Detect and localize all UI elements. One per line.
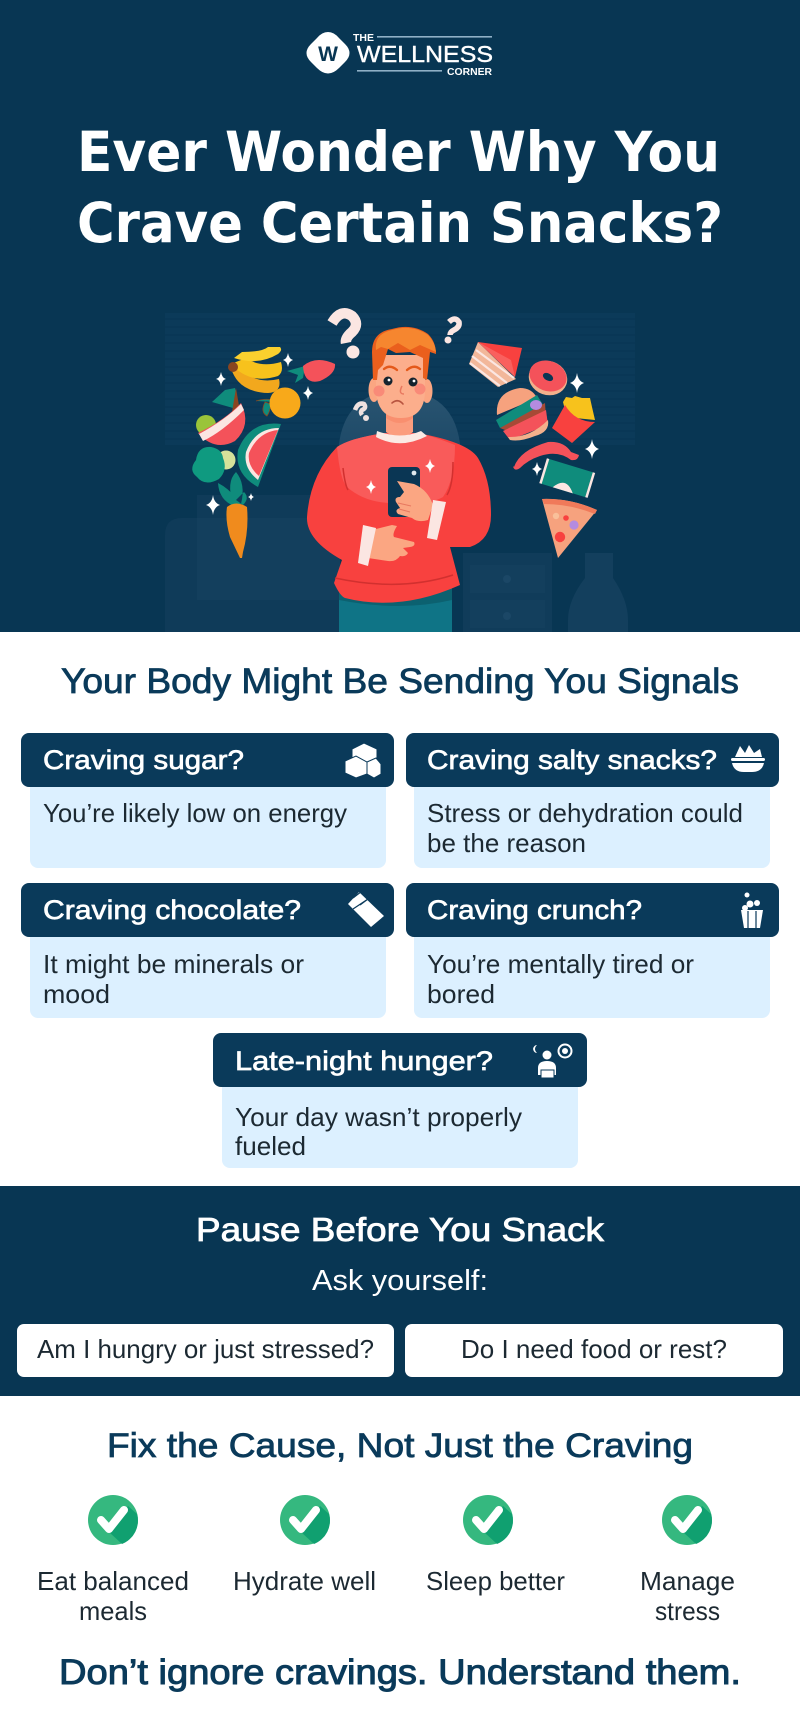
icon: strawberry: [287, 360, 335, 383]
card: craving salty snacks: Stress or dehydration could: [427, 798, 743, 828]
icon: person at night: [533, 1044, 572, 1078]
card: craving crunch: Craving crunch?: [427, 895, 642, 925]
logo wordmark: THE: [353, 33, 374, 44]
eyes: [384, 376, 392, 386]
icon: pizza: [542, 499, 597, 558]
question box 1: [17, 1324, 394, 1377]
closing statement: Don’t ignore cravings. Understand them.: [59, 1653, 741, 1692]
sweater highlight: [337, 433, 455, 503]
item: manage stress: [640, 1495, 735, 1626]
card: late-night hunger: Late-night hunger?: [235, 1046, 493, 1076]
background: arch behind head: [338, 390, 461, 460]
right cuff: [427, 500, 446, 540]
brows, nose, mouth: [384, 367, 420, 370]
icon: orange: [256, 388, 300, 418]
icon: sugar cubes: [345, 743, 381, 778]
icon: soda can: [539, 458, 595, 498]
card: late-night hunger: Your day wasn’t properly: [235, 1102, 522, 1132]
item: hydrate well: [233, 1495, 376, 1596]
trousers: [339, 585, 452, 632]
card: late-night hunger: [213, 1033, 587, 1168]
question box 2: [405, 1324, 783, 1377]
icon: sparkles: [206, 353, 599, 515]
logo: [306, 32, 493, 78]
icon: check: [662, 1495, 712, 1545]
item: eat balanced meals: meals: [79, 1596, 147, 1626]
left cuff: [358, 525, 376, 566]
icon: fries: [552, 396, 595, 443]
left hand on stomach: [368, 525, 414, 561]
icon: banana: [228, 347, 282, 393]
title: Crave Certain Snacks?: [77, 191, 723, 255]
icon: check: [463, 1495, 513, 1545]
neck: [386, 405, 413, 437]
icon: check: [280, 1495, 330, 1545]
icon: sausage: [513, 442, 579, 470]
card: craving sugar: Craving sugar?: [43, 745, 244, 775]
panel: hero: [0, 0, 800, 632]
background: cabinet: [463, 553, 552, 632]
item: manage stress: stress: [655, 1596, 720, 1626]
hair: [372, 327, 436, 380]
icon: watermelon: [237, 424, 281, 487]
question box 2: Do I need food or rest?: [461, 1334, 727, 1364]
card: craving sugar: You’re likely low on energy: [43, 798, 347, 828]
logo wordmark: [353, 33, 493, 78]
icon: burger: [496, 388, 548, 440]
illustration: person: [307, 327, 491, 632]
heading: pause: Pause Before You Snack: [196, 1211, 605, 1248]
card: craving salty snacks: be the reason: [427, 828, 586, 858]
background: sofa: [165, 495, 340, 632]
card: craving chocolate: Craving chocolate?: [43, 895, 301, 925]
card: craving salty snacks: [406, 733, 779, 868]
text: ask yourself: Ask yourself:: [312, 1265, 488, 1297]
item: sleep better: Sleep better: [426, 1566, 565, 1596]
card: late-night hunger: fueled: [235, 1131, 306, 1161]
item: sleep better: [426, 1495, 565, 1596]
logo: W: [318, 43, 338, 66]
logo mark: [306, 32, 350, 74]
title: Ever Wonder Why You: [77, 120, 720, 184]
panel: pause before you snack: [0, 1186, 800, 1396]
icon: carrot: [218, 472, 248, 558]
question box 1: Am I hungry or just stressed?: [37, 1334, 374, 1364]
background: window blinds: [165, 313, 635, 445]
heading: fix the cause: Fix the Cause, Not Just the Craving: [107, 1427, 693, 1465]
sweater: [307, 433, 491, 603]
icon: donut: [524, 355, 572, 401]
icon: snack bowl: [731, 745, 765, 772]
card: craving chocolate: [21, 883, 394, 1018]
ears: [368, 378, 380, 402]
item: manage stress: Manage: [640, 1566, 735, 1596]
background: vase: [568, 553, 628, 632]
collar: [376, 431, 427, 443]
icon: small question mark right: [444, 319, 459, 344]
icon: popcorn: [741, 892, 763, 928]
card: craving crunch: You’re mentally tired or: [427, 949, 694, 979]
card: craving sugar: [21, 733, 394, 868]
title: [77, 120, 723, 255]
logo wordmark: WELLNESS: [357, 41, 493, 67]
phone: [388, 467, 420, 517]
icon: check: [88, 1495, 138, 1545]
item: eat balanced meals: [37, 1495, 189, 1626]
icon: chocolate bar: [348, 888, 384, 927]
item: eat balanced meals: Eat balanced: [37, 1566, 189, 1596]
card: craving crunch: [406, 883, 779, 1018]
icon: salad bowl: [196, 388, 245, 445]
card: craving chocolate: It might be minerals or: [43, 949, 304, 979]
logo wordmark: CORNER: [447, 67, 493, 78]
face: [376, 355, 425, 418]
icon: broccoli: [192, 447, 236, 483]
icon: big question mark: [332, 313, 360, 358]
card: craving salty snacks: Craving salty snacks?: [427, 745, 717, 775]
heading: signals: Your Body Might Be Sending You Signals: [61, 662, 739, 701]
card: craving chocolate: mood: [43, 979, 110, 1009]
icon: sandwich: [469, 342, 522, 387]
card: craving crunch: bored: [427, 979, 495, 1009]
item: hydrate well: Hydrate well: [233, 1566, 376, 1596]
icon: small question mark left: [355, 404, 369, 421]
right hand on phone: [396, 481, 433, 521]
